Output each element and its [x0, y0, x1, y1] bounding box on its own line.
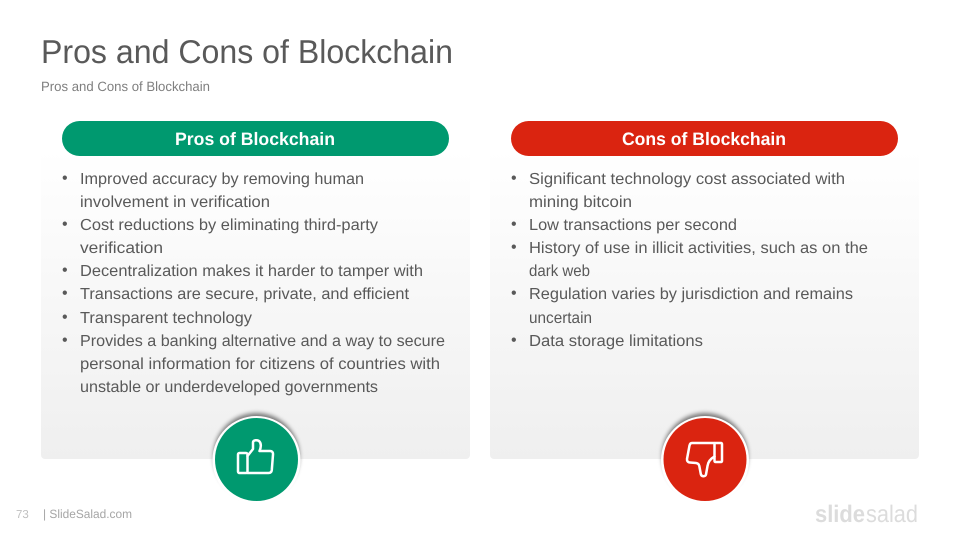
panel: pros: [41, 121, 470, 504]
list: pros: •: [62, 285, 68, 302]
list: pros: verification: [80, 240, 163, 257]
subtitle: Pros and Cons of Blockchain: [41, 79, 210, 94]
list: pros: •: [62, 262, 68, 279]
list: cons: uncertain: [529, 310, 592, 327]
list: cons: dark web: [529, 263, 590, 280]
heading: pros: [62, 121, 449, 156]
list: pros: •: [62, 332, 68, 349]
list: pros: •: [62, 216, 68, 233]
list: cons: •: [511, 332, 517, 349]
list: pros: unstable or underdeveloped governments: [80, 379, 378, 396]
list: pros: Improved accuracy by removing human: [80, 171, 364, 188]
list: cons: Low transactions per second: [529, 217, 737, 234]
list: pros: Provides a banking alternative and a way to secure: [80, 333, 445, 350]
list: cons: Data storage limitations: [529, 333, 703, 350]
page number: 73: [16, 509, 29, 521]
footer brand text: | SlideSalad.com: [43, 507, 132, 521]
list: cons: mining bitcoin: [529, 194, 632, 211]
list: cons: [511, 170, 868, 350]
panel: cons: [490, 121, 919, 504]
list: cons: Regulation varies by jurisdiction and remains: [529, 286, 853, 303]
logo: slidesalad: slide: [815, 501, 865, 528]
heading: cons: [511, 121, 898, 156]
list: cons: •: [511, 239, 517, 256]
list: pros: Cost reductions by eliminating third-party: [80, 217, 378, 234]
icon: thumbs up badge: [212, 413, 300, 504]
list: cons: •: [511, 285, 517, 302]
list: cons: Significant technology cost associated with: [529, 171, 845, 188]
heading: cons: Cons of Blockchain: [622, 129, 786, 149]
icon: thumbs down badge: [661, 413, 749, 504]
list: pros: •: [62, 309, 68, 326]
logo: slidesalad: [815, 501, 918, 528]
list: pros: Decentralization makes it harder to tamper with: [80, 263, 423, 280]
list: pros: Transparent technology: [80, 310, 252, 327]
panel background: cons: [490, 150, 919, 459]
list: pros: •: [62, 170, 68, 187]
title: Pros and Cons of Blockchain: [41, 33, 453, 70]
list: pros: Transactions are secure, private, and efficient: [80, 286, 410, 303]
list: cons: •: [511, 216, 517, 233]
list: pros: [62, 170, 445, 396]
heading: pros: Pros of Blockchain: [175, 129, 335, 149]
logo: slidesalad: salad: [866, 501, 918, 528]
panel background: pros: [41, 150, 470, 459]
list: cons: History of use in illicit activities, such as on the: [529, 240, 868, 257]
list: pros: personal information for citizens of countries with: [80, 356, 440, 373]
list: pros: involvement in verification: [80, 194, 270, 211]
list: cons: •: [511, 170, 517, 187]
